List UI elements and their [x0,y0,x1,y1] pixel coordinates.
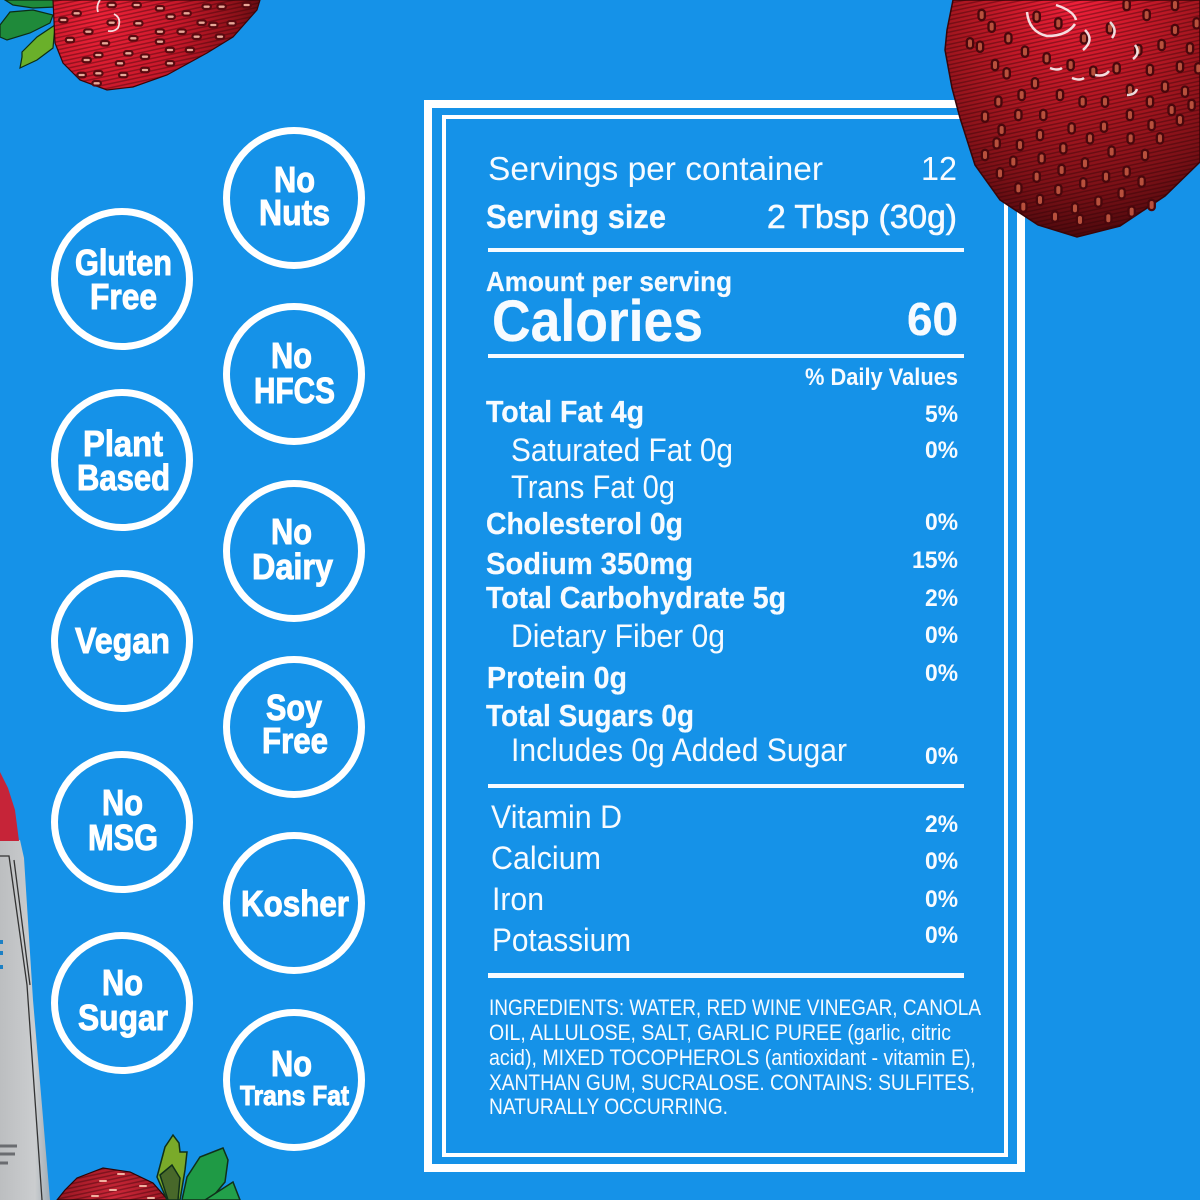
serving size value: 2 Tbsp (30g) [767,198,957,235]
protein [487,660,958,695]
ingredients text: NATURALLY OCCURRING. [489,1094,728,1119]
total carbohydrate [486,580,958,615]
badge: no hfcs: No [271,335,312,376]
badge: no nuts: Nuts [259,192,330,233]
ingredients text: OIL, ALLULOSE, SALT, GARLIC PUREE (garlic, citric [489,1020,951,1045]
potassium: 0% [925,922,958,949]
calories block [486,266,958,354]
strawberry: top right [945,0,1200,237]
protein: Protein 0g [487,660,627,695]
calories label: Calories [492,289,703,354]
badge: no nuts [226,130,362,266]
ingredients text: XANTHAN GUM, SUCRALOSE. CONTAINS: SULFITES, [489,1070,975,1095]
iron: Iron [492,881,544,917]
badge: plant based: Plant [83,423,163,464]
bottle red cap [0,772,19,841]
badge: no sugar: No [102,962,143,1003]
badge: no trans fat [226,1012,362,1148]
outer frame border [428,104,1021,1168]
strawberry leaves bottom [157,1135,240,1200]
badges left column [54,212,190,1070]
daily values heading: % Daily Values [805,364,958,391]
badge: no msg [54,754,190,890]
badge: no hfcs [226,306,362,442]
badge: kosher [226,836,362,970]
badge: no hfcs: HFCS [254,370,335,411]
total fat: Total Fat 4g [486,394,644,429]
badge: vegan: Vegan [75,620,170,661]
badge: no sugar [54,936,190,1070]
total carbohydrate: Total Carbohydrate 5g [486,580,786,615]
strawberry: bottom [57,1135,240,1200]
servings count: 12 [921,150,957,187]
saturated fat [511,432,958,468]
badge: soy free: Soy [266,687,322,728]
bottle fine print [0,1146,17,1163]
cholesterol [486,506,958,541]
bottle blue marks [0,942,3,967]
rule 1 [488,248,964,252]
badge: no nuts: No [274,159,315,200]
protein: 0% [925,660,958,687]
product bottle [0,772,50,1200]
badge: no trans fat: No [271,1043,312,1084]
badge: plant based [54,392,190,528]
badge: gluten free: Free [90,276,157,317]
badge: no dairy: Dairy [252,546,333,587]
badge: no sugar: Sugar [78,997,168,1038]
saturated fat: Saturated Fat 0g [511,432,733,468]
nutrient rows [486,394,958,770]
ingredients text: INGREDIENTS: WATER, RED WINE VINEGAR, CANOLA [489,995,981,1020]
inner frame border [444,117,1006,1155]
trans fat: Trans Fat 0g [511,469,675,505]
badge: no dairy [226,484,362,618]
badges right column [226,130,362,1148]
badge: vegan [54,574,190,708]
badge: no msg: No [102,782,143,823]
dietary fiber: Dietary Fiber 0g [511,618,725,654]
bottle body [0,840,50,1200]
panel: nutrition facts frame [428,104,1021,1168]
potassium [492,922,958,958]
badge: no dairy: No [271,511,312,552]
rule 3 [488,784,964,788]
iron: 0% [925,886,958,913]
badge: no msg: MSG [88,817,158,858]
total carbohydrate: 2% [925,585,958,612]
added sugar: Includes 0g Added Sugar [511,732,847,768]
bottle label lines [0,856,42,1200]
nutrition header [486,150,957,235]
ingredients text [489,995,981,1119]
vitamin d: Vitamin D [491,799,622,835]
iron [492,881,958,917]
vitamin d [491,799,958,838]
potassium: Potassium [492,922,631,958]
strawberry leaves [0,0,55,68]
strawberry: top left [0,0,260,90]
servings per container: Servings per container [488,150,823,187]
badge: gluten free [54,212,190,346]
total fat [486,394,958,429]
sodium: Sodium 350mg [486,546,693,581]
calcium [491,840,958,876]
serving size: Serving size [486,198,666,235]
saturated fat: 0% [925,437,958,464]
cholesterol: Cholesterol 0g [486,506,683,541]
calories value: 60 [907,293,958,345]
rule 4 [488,973,964,978]
sodium: 15% [912,547,958,574]
ingredients text: acid), MIXED TOCOPHEROLS (antioxidant - vitamin E), [489,1045,976,1070]
badge: gluten free: Gluten [75,242,172,283]
strawberry seeds bottom [92,1174,154,1198]
total fat: 5% [925,401,958,428]
amount per serving: Amount per serving [486,266,732,297]
badge: kosher: Kosher [241,883,349,924]
cholesterol: 0% [925,509,958,536]
added sugar: 0% [925,743,958,770]
calcium: Calcium [491,840,601,876]
calcium: 0% [925,848,958,875]
sodium [486,546,958,581]
vitamins and minerals [491,799,958,958]
badge: plant based: Based [77,457,170,498]
badge: no trans fat: Trans Fat [240,1080,349,1111]
vitamin d: 2% [925,811,958,838]
dietary fiber [511,618,958,654]
badge: soy free [226,660,362,794]
badge: soy free: Free [262,720,328,761]
dietary fiber: 0% [925,622,958,649]
total sugars: Total Sugars 0g [486,698,694,733]
rule 2 [488,354,964,358]
